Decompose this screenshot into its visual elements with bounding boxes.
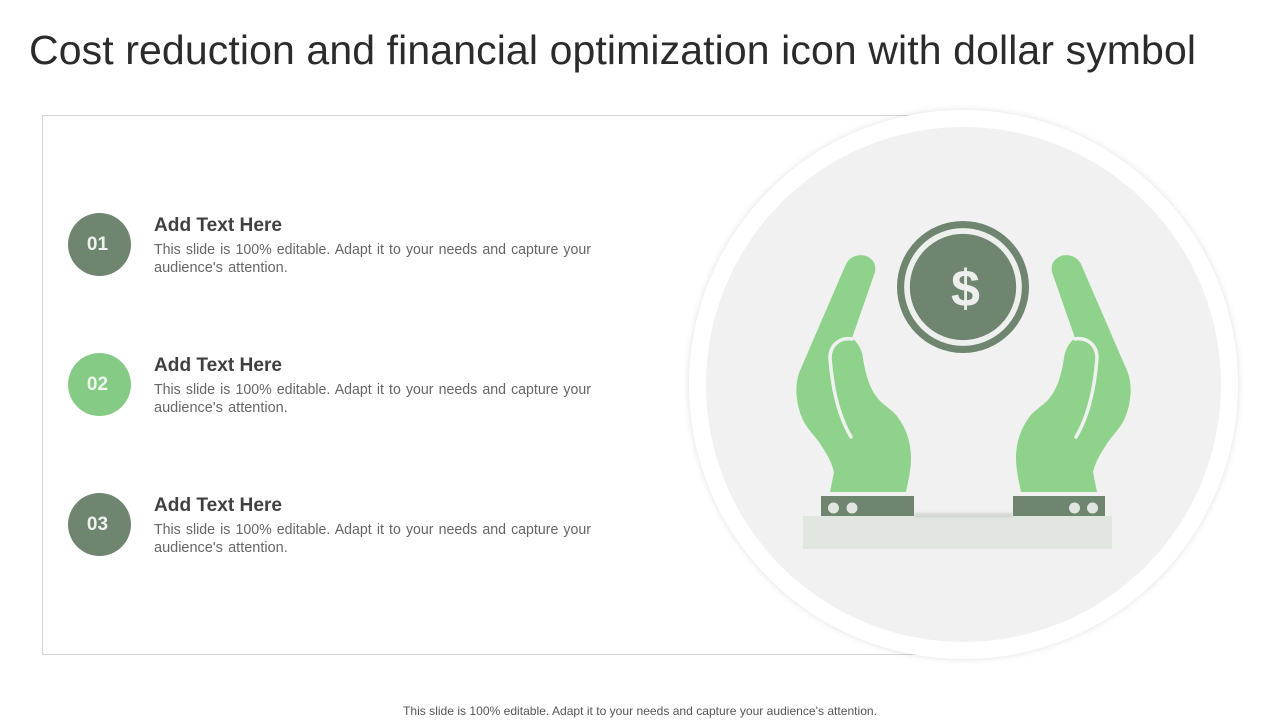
body text 01: audience's attention. <box>154 260 288 276</box>
badge 03: 03 <box>87 514 108 535</box>
circle backdrop <box>689 110 1238 659</box>
body text 02: audience's attention. <box>154 400 288 416</box>
body text 03: audience's attention. <box>154 540 288 556</box>
heading 03: Add Text Here <box>154 494 282 516</box>
icon: right cuff <box>1013 496 1105 516</box>
icon: dollar coin: $ <box>951 260 980 318</box>
list item 03 <box>68 493 591 556</box>
footer note: This slide is 100% editable. Adapt it to your needs and capture your audience's attention. <box>403 704 877 718</box>
body text 01: This slide is 100% editable. Adapt it to your needs and capture your <box>154 242 591 258</box>
badge 03 <box>68 493 131 556</box>
list item 02 <box>68 353 591 416</box>
icon: dollar coin <box>897 221 1029 353</box>
icon: shelf base <box>803 514 1112 549</box>
icon: right hand <box>1016 255 1131 492</box>
panel: text list frame <box>42 116 922 654</box>
heading 02: Add Text Here <box>154 354 282 376</box>
badge 02 <box>68 353 131 416</box>
badge 01 <box>68 213 131 276</box>
list item 01 <box>68 213 591 276</box>
badge 01: 01 <box>87 234 108 255</box>
badge 02: 02 <box>87 374 108 395</box>
body text 02: This slide is 100% editable. Adapt it to your needs and capture your <box>154 382 591 398</box>
heading 01: Add Text Here <box>154 214 282 236</box>
body text 03: This slide is 100% editable. Adapt it to your needs and capture your <box>154 522 591 538</box>
icon: left hand <box>796 255 911 492</box>
title: Cost reduction and financial optimization icon with dollar symbol <box>29 27 1196 73</box>
icon: left cuff <box>821 496 914 516</box>
